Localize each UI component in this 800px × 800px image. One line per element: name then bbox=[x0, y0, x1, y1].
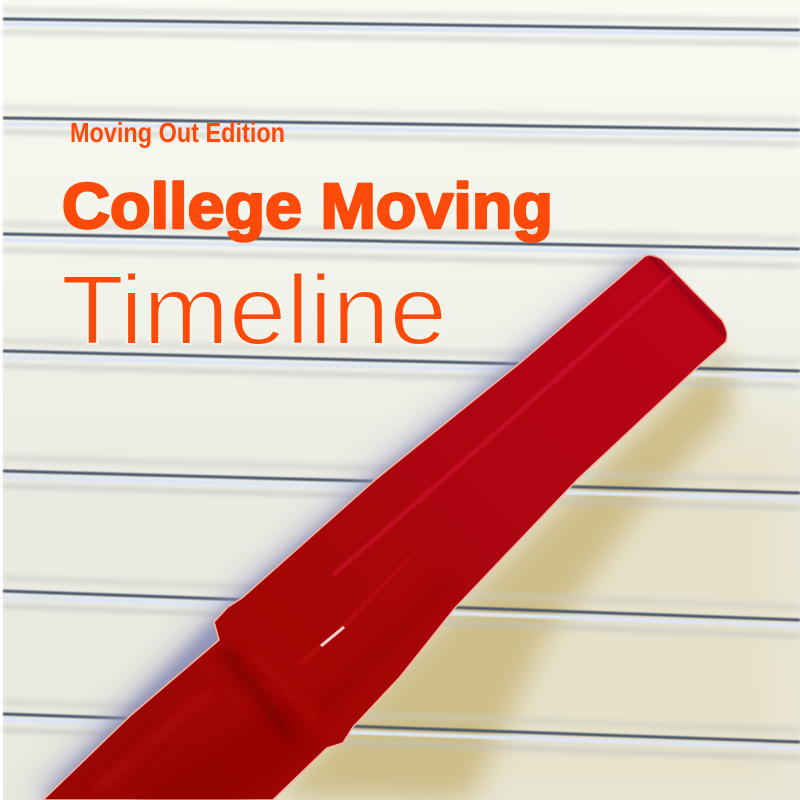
lower cap ridge bbox=[300, 557, 410, 664]
pen body edge bbox=[43, 255, 727, 800]
barrel highlight bbox=[102, 704, 196, 786]
pen bbox=[43, 254, 728, 800]
cap ridge highlight bbox=[333, 275, 673, 575]
ring shadow bbox=[224, 650, 290, 735]
title: College Moving: College Moving bbox=[62, 170, 553, 242]
title: Timeline: Timeline bbox=[61, 255, 447, 365]
subtitle: Moving Out Edition: Moving Out Edition bbox=[70, 117, 285, 148]
clip shine bbox=[321, 627, 344, 646]
pen shading bbox=[93, 254, 728, 800]
darker cap flanks bbox=[346, 582, 448, 684]
ring highlight bbox=[247, 647, 320, 723]
barrel tone bbox=[130, 700, 320, 800]
pen shadow bbox=[30, 250, 660, 800]
tip darkening bbox=[648, 254, 728, 336]
warm shadow on paper bbox=[270, 345, 800, 800]
